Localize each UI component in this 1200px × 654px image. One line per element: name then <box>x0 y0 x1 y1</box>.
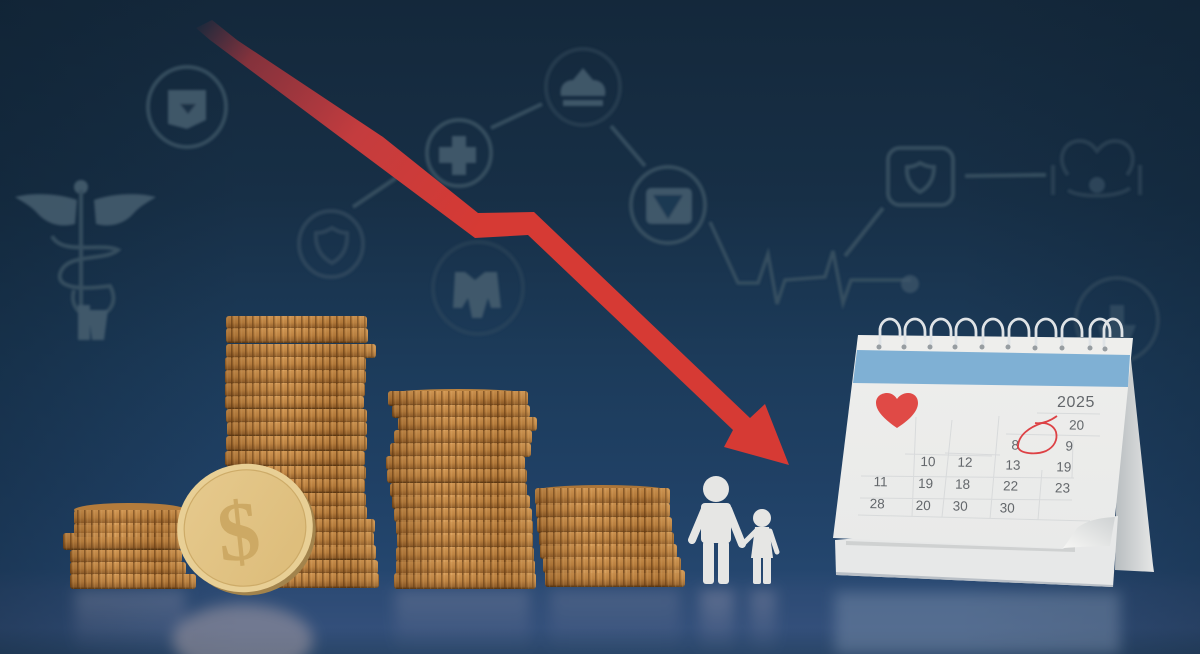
coin stack: tall <box>225 316 379 588</box>
calendar dates: 11 <box>873 474 888 489</box>
large gold dollar coin <box>164 449 329 610</box>
coin stack: middle <box>386 389 537 589</box>
icon: shield in circle <box>299 211 363 277</box>
calendar dates: 28 <box>870 496 885 511</box>
dollar sign: $ <box>213 484 264 581</box>
red downward arrow <box>196 20 789 465</box>
coin stack: small left <box>63 503 196 589</box>
blue header band <box>853 350 1130 387</box>
calendar dates: 22 <box>1003 478 1018 494</box>
year label: 2025 <box>1057 394 1095 411</box>
desk calendar <box>833 319 1154 587</box>
connector line <box>491 104 542 128</box>
coin stack: right <box>535 485 685 587</box>
calendar dates: 30 <box>953 499 968 514</box>
icon: heart square in circle <box>631 167 705 243</box>
calendar dates: 19 <box>1056 459 1072 475</box>
calendar dates: 20 <box>916 498 931 513</box>
ECG heartbeat line <box>710 222 919 304</box>
calendar dates: 9 <box>1065 438 1073 454</box>
icon: shield in rounded square <box>888 148 953 205</box>
icon: heart with pulse <box>1053 141 1140 196</box>
calendar dates: 23 <box>1055 480 1070 496</box>
connector arrow <box>965 175 1046 176</box>
connector line <box>611 126 645 166</box>
icon: figure in circle <box>433 242 523 334</box>
calendar page <box>833 335 1133 548</box>
calendar back stand <box>1115 350 1154 572</box>
page fold shadow <box>846 541 1075 552</box>
floor reflections <box>75 590 1120 654</box>
calendar dates: 30 <box>1000 500 1015 516</box>
icon: adult and child figures <box>692 476 777 584</box>
icon: medical bag in circle <box>148 67 226 147</box>
red circle mark <box>1018 416 1057 453</box>
calendar dates: 12 <box>957 455 973 470</box>
heart icon <box>876 393 918 428</box>
calendar dates: 13 <box>1005 457 1021 473</box>
spiral rings <box>880 319 1122 347</box>
connector line <box>353 178 396 207</box>
calendar dates: 20 <box>1069 418 1084 433</box>
calendar dates: 18 <box>955 477 970 492</box>
date grid <box>858 413 1100 521</box>
calendar dates: 10 <box>920 454 936 469</box>
connector line <box>845 208 883 256</box>
adult figure <box>692 476 742 584</box>
calendar dates: 8 <box>1011 438 1019 453</box>
calendar dates: 19 <box>918 476 933 491</box>
calendar dates <box>870 414 1084 517</box>
calendar base <box>835 516 1118 587</box>
icon: person in circle <box>1076 278 1158 362</box>
icon: medical cross in circle <box>427 120 491 186</box>
child figure <box>743 509 777 584</box>
icon: caduceus <box>15 180 156 340</box>
background medical icons <box>15 49 1158 362</box>
icon: crown in circle <box>546 49 620 125</box>
ring holes <box>876 344 1108 352</box>
page curl <box>1063 517 1115 548</box>
